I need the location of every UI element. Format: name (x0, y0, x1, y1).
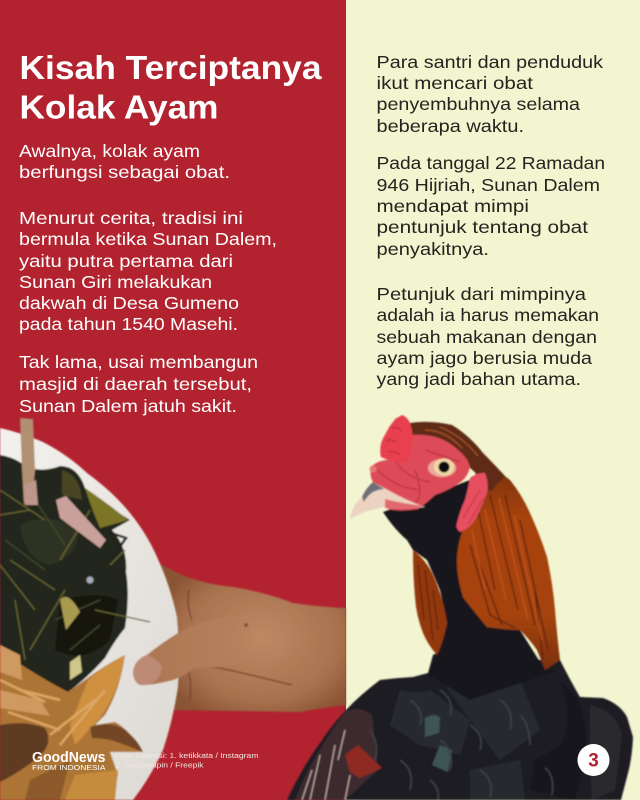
text block: intro: Awalnya, kolak ayam (19, 141, 200, 161)
panel: cream right background (346, 0, 640, 800)
illustration: hand behind plate (160, 564, 346, 712)
rooster eye (428, 458, 456, 477)
page number badge (578, 744, 610, 776)
panel: red left background (0, 0, 346, 800)
text block: story origin: yaitu putra pertama dari (19, 251, 233, 271)
photo credits: 2. suriyayapin / Freepik (116, 760, 204, 770)
text block: story origin: bermula ketika Sunan Dalem, (19, 229, 277, 249)
text block: seeking cure (376, 52, 603, 136)
text block: the dream (376, 153, 605, 259)
text block: the dream: Pada tanggal 22 Ramadan (376, 153, 605, 173)
photo credits: Foto Ilustrasi: 1. ketikkata / Instagram (116, 751, 258, 760)
text block: seeking cure: ikut mencari obat (376, 73, 533, 93)
text block: story origin: dakwah di Desa Gumeno (19, 293, 239, 313)
rooster wattle (456, 473, 488, 532)
text block: falls ill (19, 352, 258, 416)
text block: the dream: pentunjuk tentang obat (376, 217, 588, 237)
food: dark greens (0, 455, 130, 692)
text block: the dream: mendapat mimpi (376, 196, 529, 216)
text block: the instruction: ayam jago berusia muda (376, 348, 592, 368)
page number badge: 3 (588, 750, 599, 772)
logo: GoodNews from Indonesia: GoodNews (32, 750, 106, 766)
text block: the instruction (376, 284, 599, 389)
rooster crown feathers (410, 422, 505, 492)
text block: the instruction: yang jadi bahan utama. (376, 369, 581, 389)
title: Kolak Ayam (20, 90, 218, 126)
title (20, 50, 322, 126)
rooster left hackle (413, 550, 447, 655)
text block: seeking cure: beberapa waktu. (376, 116, 524, 136)
text block: the dream: 946 Hijriah, Sunan Dalem (376, 175, 600, 195)
text block: falls ill: masjid di daerah tersebut, (19, 374, 252, 394)
rooster face (370, 435, 470, 510)
text block: the instruction: Petunjuk dari mimpinya (376, 284, 586, 304)
rooster comb (380, 415, 412, 462)
illustration: thumb on plate (133, 615, 255, 685)
rooster beak (350, 482, 425, 519)
illustration: plate of kolak ayam (0, 418, 179, 800)
text block: story origin (19, 208, 277, 334)
text block: the instruction: sebuah makanan dengan (376, 327, 597, 347)
text block: seeking cure: Para santri dan penduduk (376, 52, 603, 72)
illustration: rooster (287, 415, 633, 800)
text block: seeking cure: penyembuhnya selama (376, 94, 580, 114)
food: lemongrass stalks (20, 418, 35, 504)
text block: the instruction: adalah ia harus memakan (376, 305, 599, 325)
rooster right hackle (457, 452, 560, 670)
text block: intro (19, 141, 230, 182)
title: Kisah Terciptanya (20, 50, 322, 87)
rooster neck black (383, 480, 560, 700)
text block: story origin: Menurut cerita, tradisi ini (19, 208, 243, 228)
logo: GoodNews from Indonesia: FROM INDONESIA (32, 765, 106, 772)
rooster body (287, 640, 633, 800)
text block: falls ill: Tak lama, usai membangun (19, 352, 258, 372)
text block: intro: berfungsi sebagai obat. (19, 162, 230, 182)
text block: the dream: penyakitnya. (376, 239, 489, 259)
food: fried shreds (0, 650, 143, 800)
text block: story origin: pada tahun 1540 Masehi. (19, 314, 238, 334)
photo credits (116, 751, 258, 770)
text block: falls ill: Sunan Dalem jatuh sakit. (19, 396, 237, 416)
text block: story origin: Sunan Giri melakukan (19, 272, 212, 292)
